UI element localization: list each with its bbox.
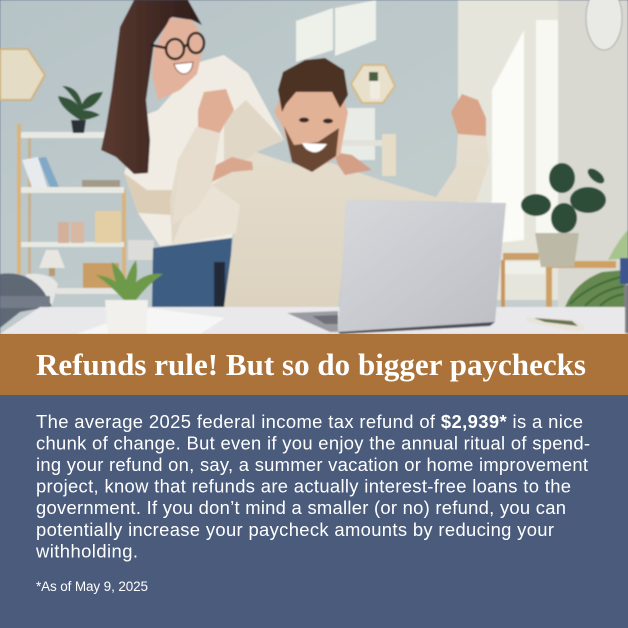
body paragraph: potentially increase your paycheck amounts by reducing your	[36, 519, 554, 540]
bookshelf	[17, 124, 154, 294]
body paragraph: ing your refund on, say, a summer vacation or home improvement	[36, 454, 588, 475]
man's beard	[284, 126, 339, 172]
laptop	[287, 200, 506, 334]
title: Refunds rule! But so do bigger paychecks	[36, 347, 586, 382]
corner plant with pencil holder	[565, 230, 628, 333]
body paragraph: withholding.	[35, 540, 138, 562]
man's sweater	[170, 127, 489, 307]
body panel	[0, 395, 628, 628]
raised right fist	[451, 94, 486, 136]
potted desk plant	[96, 260, 163, 334]
woman's jeans	[152, 238, 232, 307]
photo: excited couple at a laptop	[0, 0, 628, 335]
wall plant	[58, 86, 103, 133]
woman's face	[152, 18, 205, 100]
woman's hair	[101, 0, 202, 174]
table lamp	[39, 250, 65, 276]
body paragraph: chunk of change. But even if you enjoy the annual ritual of spend-	[36, 432, 590, 454]
smartphone on desk	[526, 317, 585, 331]
room background	[0, 0, 628, 335]
body paragraph: project, know that refunds are actually interest-free loans to the	[36, 476, 571, 496]
man's eyes and smile	[299, 118, 333, 152]
potted window plant	[521, 163, 607, 267]
hexagon wall shelf left	[0, 49, 45, 100]
wall clock	[586, 0, 622, 50]
woman's glasses	[151, 33, 204, 59]
man's hands on shoulders	[212, 157, 253, 182]
body paragraph: government. If you don’t mind a smaller (or no) refund, you can	[36, 497, 566, 518]
hexagon wall shelf right	[351, 65, 395, 103]
woman's smile	[174, 62, 193, 74]
body paragraph	[35, 411, 590, 562]
man	[170, 58, 489, 307]
man's head	[274, 90, 348, 172]
desk	[0, 307, 625, 334]
sofa	[0, 273, 58, 328]
right side table and chair	[501, 253, 616, 307]
woman's sweater	[124, 55, 284, 246]
raised left fist	[198, 89, 234, 133]
footnote: *As of May 9, 2025	[36, 579, 148, 594]
body paragraph: The average 2025 federal income tax refund of $2,939* is a nice	[36, 411, 583, 432]
title band	[0, 334, 628, 395]
woman	[101, 0, 284, 307]
man's hair	[278, 58, 348, 112]
